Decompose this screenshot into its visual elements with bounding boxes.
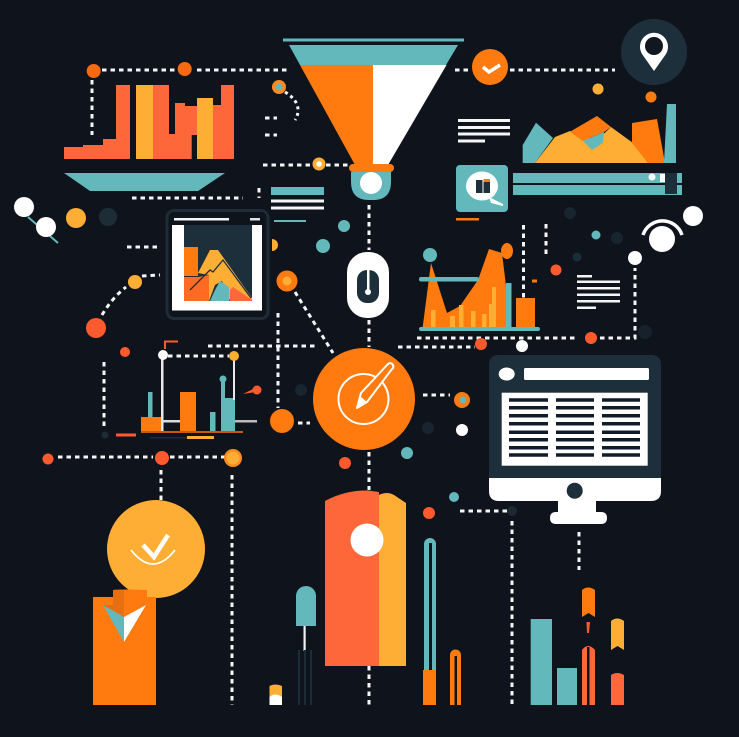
text lines right bbox=[577, 275, 620, 309]
area chart upper right bbox=[523, 104, 676, 163]
dots beside framed chart bbox=[272, 220, 350, 292]
middle connector dots bbox=[42, 332, 597, 519]
scattered dots right bbox=[532, 207, 652, 339]
search icon box bbox=[456, 165, 508, 220]
yellow check circle bbox=[107, 500, 205, 598]
mouse icon bbox=[347, 252, 389, 318]
nodes and dots left bbox=[14, 197, 142, 357]
dashed connector lines bbox=[58, 70, 635, 705]
horizontal progress bars bbox=[513, 173, 682, 195]
wifi style signal icon bbox=[628, 206, 703, 265]
mountain area chart bbox=[419, 243, 540, 331]
top connector dots bbox=[87, 62, 326, 170]
central book bar bbox=[325, 490, 406, 666]
orange badge with arrow bbox=[93, 590, 156, 705]
small dots near area chart bbox=[592, 84, 656, 102]
check badge bbox=[472, 49, 508, 85]
slim bars bottom center bbox=[423, 538, 461, 705]
red pin dot bbox=[243, 386, 262, 394]
small yellow and white block bbox=[270, 684, 282, 705]
center pencil circle bbox=[313, 348, 415, 450]
teal pin bbox=[296, 586, 316, 705]
bar chart bottom right bbox=[531, 588, 624, 705]
framed chart card bbox=[167, 210, 268, 318]
bottom-left bar chart bbox=[102, 342, 257, 439]
funnel bbox=[283, 38, 464, 200]
top-left bar chart bbox=[64, 85, 234, 191]
small text block with teal header bbox=[271, 187, 324, 222]
location pin badge bbox=[621, 19, 687, 85]
monitor with data table bbox=[489, 355, 661, 524]
text lines upper right bbox=[458, 119, 510, 142]
